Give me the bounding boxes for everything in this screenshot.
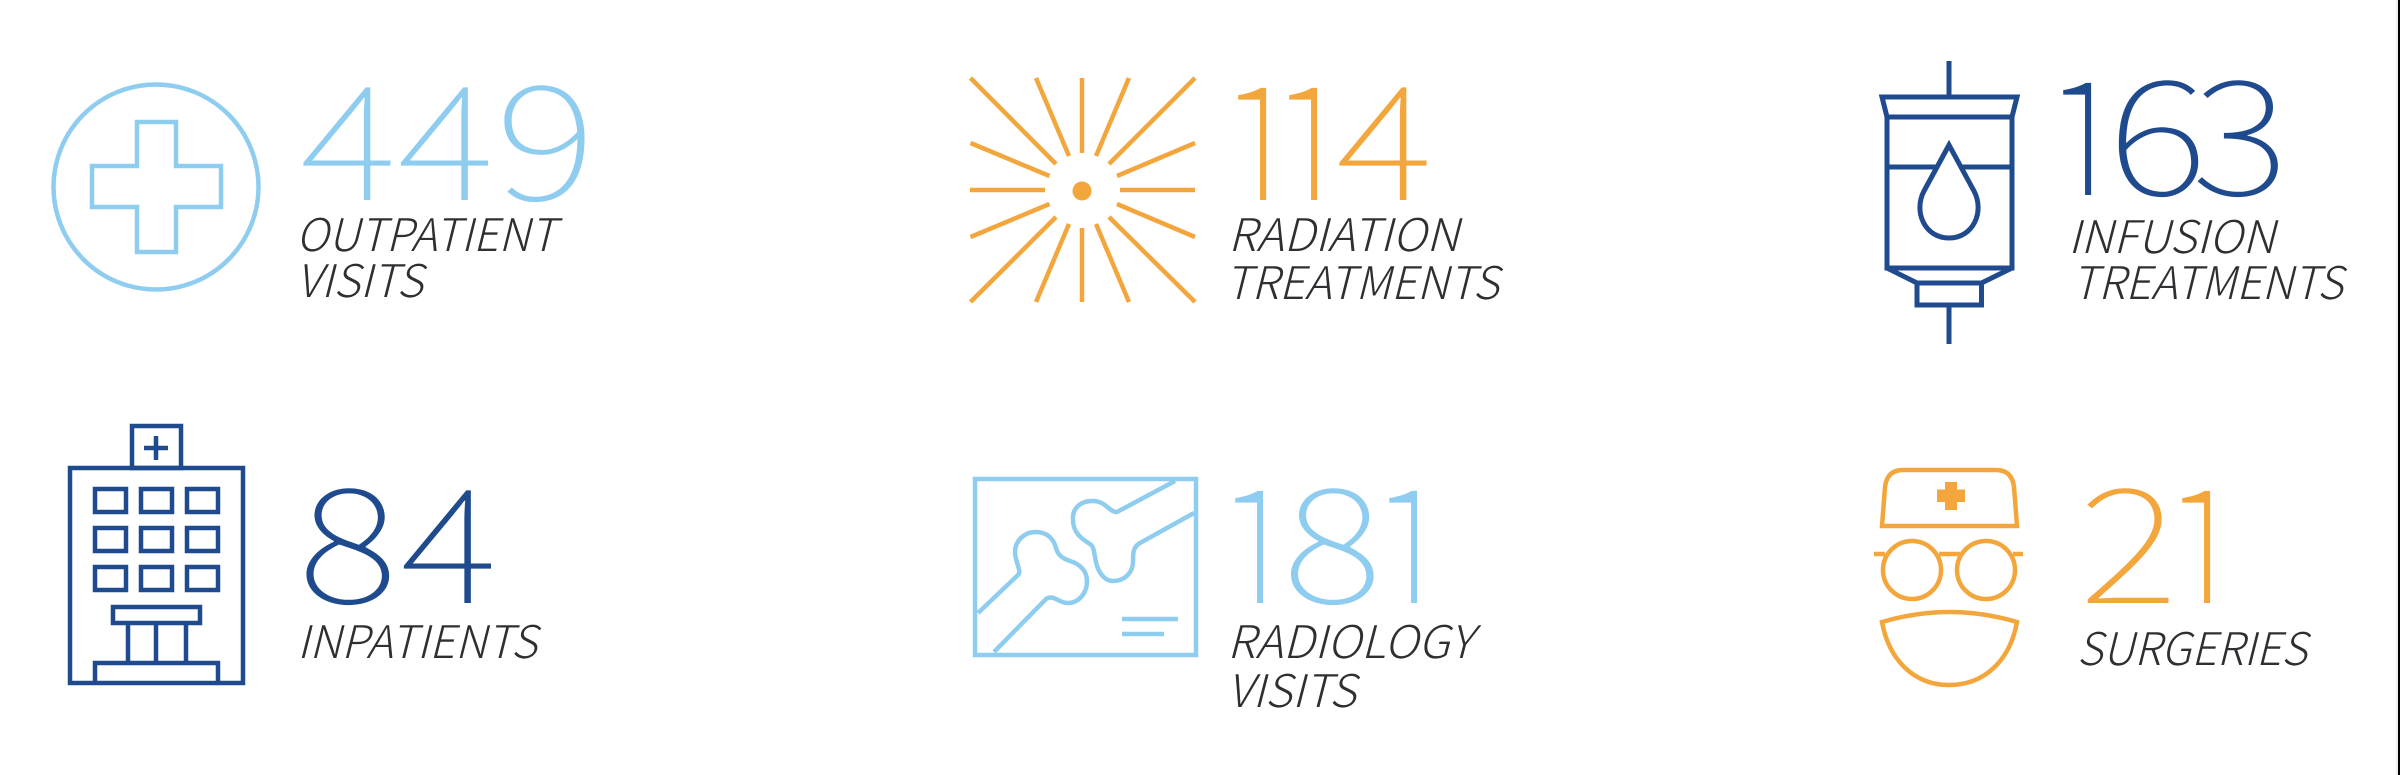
- icon: medical cross in circle: [54, 84, 258, 290]
- icon: surgeon face: [1874, 470, 2023, 685]
- icon: radiation sunburst: [970, 78, 1195, 302]
- number: 163: 1: [2040, 4, 2130, 254]
- label: surgeries: SURGERIES: [2077, 613, 2312, 678]
- number: 114: 1: [1266, 9, 1356, 259]
- number: 84: 4: [400, 418, 498, 650]
- panel: outpatient visits: [54, 15, 596, 310]
- icon: hospital building: [70, 426, 243, 683]
- panel: surgeries: [1874, 468, 2312, 688]
- label: radiation treatments: TREATMENTS: [1225, 247, 1504, 312]
- number: 21: 1: [2159, 412, 2249, 662]
- panel: inpatients: [70, 418, 542, 683]
- number: 84: 8: [298, 418, 398, 650]
- number: 163: 3: [2192, 10, 2288, 242]
- label: radiology visits: [1227, 606, 1482, 720]
- number: 163: 6: [2108, 10, 2208, 242]
- number: 449: 4: [300, 15, 397, 247]
- label: infusion treatments: TREATMENTS: [2072, 247, 2348, 312]
- icon: x-ray of a bone joint: [975, 479, 1196, 655]
- number: 21: 2: [2079, 418, 2178, 650]
- number: 449: 4: [398, 15, 494, 247]
- number: 449: 9: [495, 15, 596, 247]
- icon: infusion bag: [1882, 61, 2017, 344]
- number: 181: 1: [1212, 412, 1302, 662]
- number: 163: [2063, 80, 2278, 198]
- label: radiation treatments: [1225, 199, 1504, 312]
- number: 181: 8: [1282, 418, 1382, 650]
- label: radiation treatments: RADIATION: [1228, 199, 1463, 264]
- label: inpatients: INPATIENTS: [297, 606, 542, 671]
- number: 181: [1235, 488, 1418, 606]
- label: infusion treatments: [2068, 201, 2348, 312]
- number: 114: 1: [1215, 9, 1305, 259]
- panel: radiation treatments: [969, 76, 1504, 304]
- label: outpatient visits: VISITS: [296, 245, 428, 310]
- number: 181: 1: [1366, 412, 1456, 662]
- number: 449: [300, 15, 596, 247]
- label: outpatient visits: [296, 199, 563, 310]
- label: radiology visits: VISITS: [1227, 655, 1361, 720]
- number: 21: [2087, 488, 2210, 603]
- panel: radiology visits: [972, 476, 1482, 708]
- label: radiology visits: RADIOLOGY: [1227, 606, 1482, 671]
- number: 114: 4: [1336, 15, 1433, 247]
- label: outpatient visits: OUTPATIENT: [296, 199, 563, 264]
- label: infusion treatments: INFUSION: [2068, 201, 2279, 266]
- number: 84: [298, 418, 498, 650]
- panel: infusion treatments: [1878, 61, 2348, 344]
- number: 114: [1238, 87, 1426, 200]
